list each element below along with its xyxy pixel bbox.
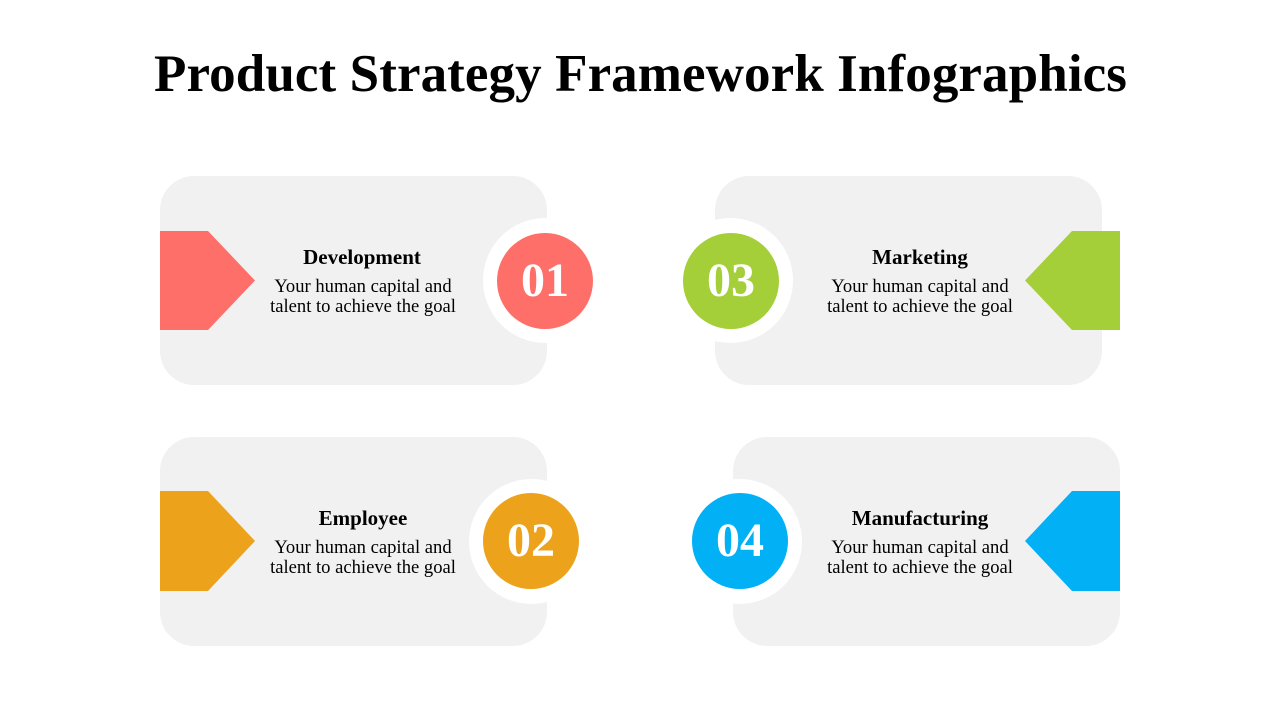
number: 02: 02 [507, 514, 555, 567]
number ring [469, 479, 594, 604]
arrow: development [160, 231, 255, 330]
number: 03: 03 [707, 254, 755, 307]
text: marketing: talent to achieve the goal [827, 296, 1013, 317]
number: 04: 04 [716, 514, 764, 567]
arrow: employee [160, 491, 255, 591]
heading: marketing: Marketing [872, 245, 968, 269]
arrow: manufacturing [1025, 491, 1120, 591]
text: development [270, 276, 456, 317]
panel: manufacturing [692, 437, 1120, 646]
number: 01 [497, 233, 593, 329]
number: 02 [483, 493, 579, 589]
text: employee: Your human capital and [274, 537, 452, 558]
heading: manufacturing: Manufacturing [852, 506, 988, 530]
number: 03 [683, 233, 779, 329]
number: 01: 01 [521, 254, 569, 307]
text: employee [270, 537, 456, 578]
text: employee: talent to achieve the goal [270, 557, 456, 578]
card background [160, 176, 547, 385]
text: marketing [827, 276, 1013, 317]
heading: development: Development [303, 245, 421, 269]
number: 04 [692, 493, 788, 589]
text: manufacturing: Your human capital and [831, 537, 1009, 558]
number ring [668, 218, 793, 343]
title: Product Strategy Framework Infographics [154, 45, 1127, 103]
text: manufacturing: talent to achieve the goal [827, 557, 1013, 578]
panel: development [160, 176, 593, 385]
card background [715, 176, 1102, 385]
panel: marketing [683, 176, 1120, 385]
number ring [677, 479, 802, 604]
arrow: marketing [1025, 231, 1120, 330]
text: development: talent to achieve the goal [270, 296, 456, 317]
text: manufacturing [827, 537, 1013, 578]
text: marketing: Your human capital and [831, 276, 1009, 297]
text: development: Your human capital and [274, 276, 452, 297]
number ring [483, 218, 608, 343]
panel: employee [160, 437, 579, 646]
heading: employee: Employee [319, 506, 407, 530]
card background [160, 437, 547, 646]
card background [733, 437, 1120, 646]
